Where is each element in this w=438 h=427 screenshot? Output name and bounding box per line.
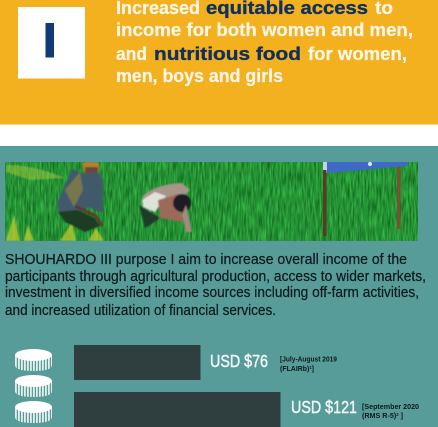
bar: USD 76 — [74, 345, 337, 380]
standing woman — [57, 162, 103, 232]
body paragraph — [5, 252, 426, 319]
bending woman — [139, 183, 192, 232]
bar: USD 76: [July-August 2019 — [280, 354, 337, 364]
number box — [18, 7, 85, 78]
icon: coin stack — [15, 349, 52, 423]
bar: USD 121 — [74, 392, 419, 427]
bar: USD 121: 2 — [396, 412, 399, 417]
yellow header band — [0, 0, 438, 124]
heading: purpose statement: and — [116, 43, 147, 64]
teal content panel — [0, 146, 438, 427]
bar: USD 121: ] — [399, 411, 403, 420]
body paragraph: participants through agricultural production, access to wider markets, — [5, 269, 426, 285]
bar: USD 121: (RMS R-5) — [362, 411, 398, 420]
heading: purpose statement: for women, — [308, 43, 407, 64]
bar: USD 121: [September 2020 — [362, 402, 419, 411]
bar: USD 76: USD $76 — [210, 351, 268, 371]
bar: USD 76: (FLAIRb) — [280, 364, 312, 373]
bar: USD 121: USD $121 — [291, 397, 357, 417]
body paragraph: SHOUHARDO III purpose I aim to increase overall income of the — [5, 252, 407, 268]
signboard — [323, 162, 408, 236]
bar: USD 76: 1 — [309, 365, 312, 370]
body paragraph: and increased utilization of financial services. — [5, 303, 276, 319]
heading: purpose statement: nutritious food — [154, 43, 301, 64]
photo: women working in a rice field — [5, 162, 418, 241]
heading: purpose statement — [116, 0, 413, 86]
body paragraph: investment in diversified income sources including off-farm activities, — [5, 285, 419, 301]
heading: purpose statement: income for both women and men, — [116, 19, 413, 40]
bar: USD 76: ] — [312, 364, 314, 373]
heading: purpose statement: men, boys and girls — [116, 65, 283, 86]
